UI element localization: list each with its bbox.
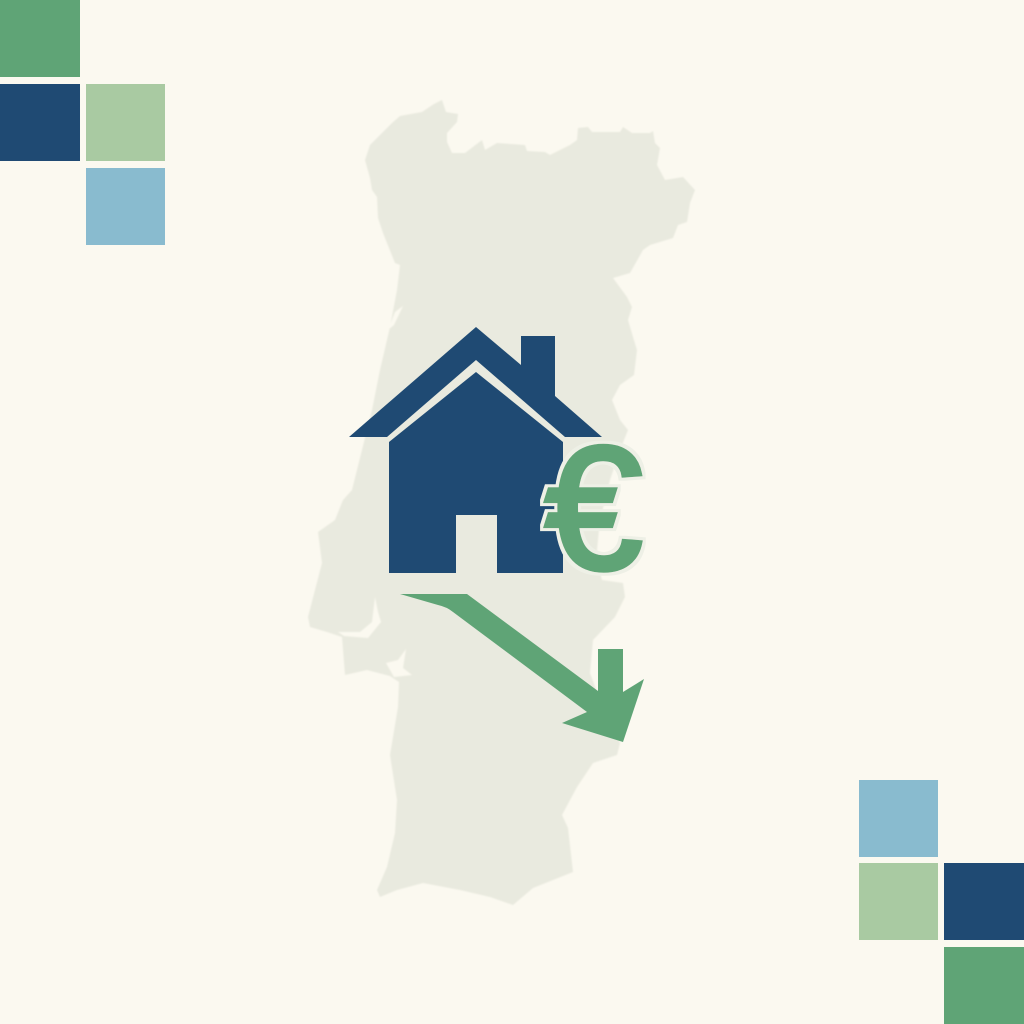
house body with door (389, 372, 563, 573)
arrow: falling prices (400, 594, 644, 742)
corner squares: top left (0, 0, 165, 245)
lagoon: Aveiro (388, 306, 403, 330)
house roof and chimney (349, 327, 602, 437)
icon: euro symbol: € (545, 412, 642, 606)
estuary: Tagus (338, 597, 381, 638)
icon: house (349, 327, 602, 573)
map of Portugal (308, 100, 695, 905)
estuary: Sado (386, 649, 412, 677)
corner squares: bottom right (859, 780, 1024, 1024)
